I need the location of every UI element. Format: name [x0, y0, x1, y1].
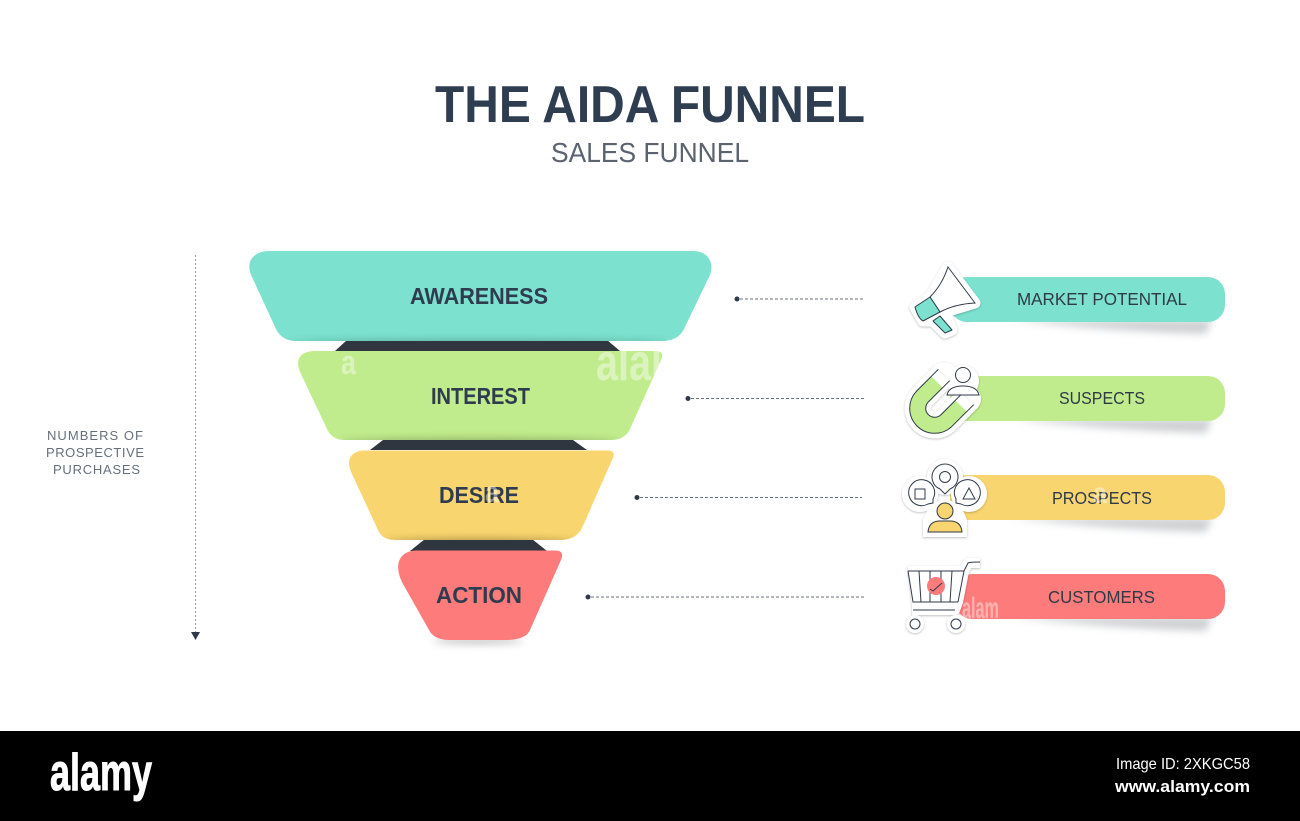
- leader line: action: [586, 594, 865, 600]
- label bar: prospects: a: [1093, 477, 1107, 510]
- axis label: PROSPECTIVE: [46, 445, 144, 460]
- funnel stage: desire: DESIRE: [439, 482, 519, 508]
- vertical axis arrow: [191, 255, 200, 640]
- funnel stage: action: [398, 550, 562, 644]
- footer bar: [0, 731, 1300, 821]
- funnel stage: awareness: [249, 251, 711, 346]
- funnel stage: desire: a: [485, 476, 499, 509]
- leader line: desire: [634, 495, 862, 500]
- label bar: customers: CUSTOMERS: [1048, 587, 1155, 607]
- icon: shopping cart: [906, 562, 980, 633]
- title: THE AIDA FUNNEL: [435, 76, 865, 134]
- leader line: interest: [686, 396, 865, 401]
- label bar: market potential: MARKET POTENTIAL: [1017, 289, 1187, 309]
- funnel stage: awareness: AWARENESS: [410, 283, 548, 309]
- funnel stage: desire: [349, 450, 614, 545]
- label bar: prospects: PROSPECTS: [1052, 488, 1152, 508]
- icon: person with three options: [902, 459, 987, 537]
- label bar: customers: [955, 574, 1225, 631]
- funnel stage: interest: INTEREST: [431, 383, 530, 409]
- icon: magnet attracting person: [918, 365, 979, 425]
- axis label: PURCHASES: [53, 462, 140, 477]
- label bar: suspects: SUSPECTS: [1059, 388, 1145, 408]
- funnel stage: interest: [298, 351, 662, 440]
- footer logo: alamy: [50, 744, 152, 802]
- axis label: NUMBERS OF: [47, 428, 143, 443]
- axis label: [46, 428, 144, 477]
- funnel stage: action: ACTION: [436, 582, 522, 608]
- label bar: customers: alam: [962, 592, 999, 625]
- footer url: www.alamy.com: [1114, 777, 1250, 796]
- leader line: awareness: [734, 296, 865, 302]
- icon: megaphone: [915, 267, 975, 333]
- label bar: prospects: [950, 475, 1225, 532]
- subtitle: SALES FUNNEL: [551, 137, 749, 168]
- label bar: suspects: [950, 376, 1225, 433]
- funnel stage: interest: alal: [596, 334, 662, 392]
- image id: Image ID: 2XKGC58: [1116, 756, 1250, 773]
- label bar: market potential: [950, 277, 1225, 334]
- funnel stage: interest: a: [341, 344, 357, 382]
- funnel connectors: [335, 340, 620, 551]
